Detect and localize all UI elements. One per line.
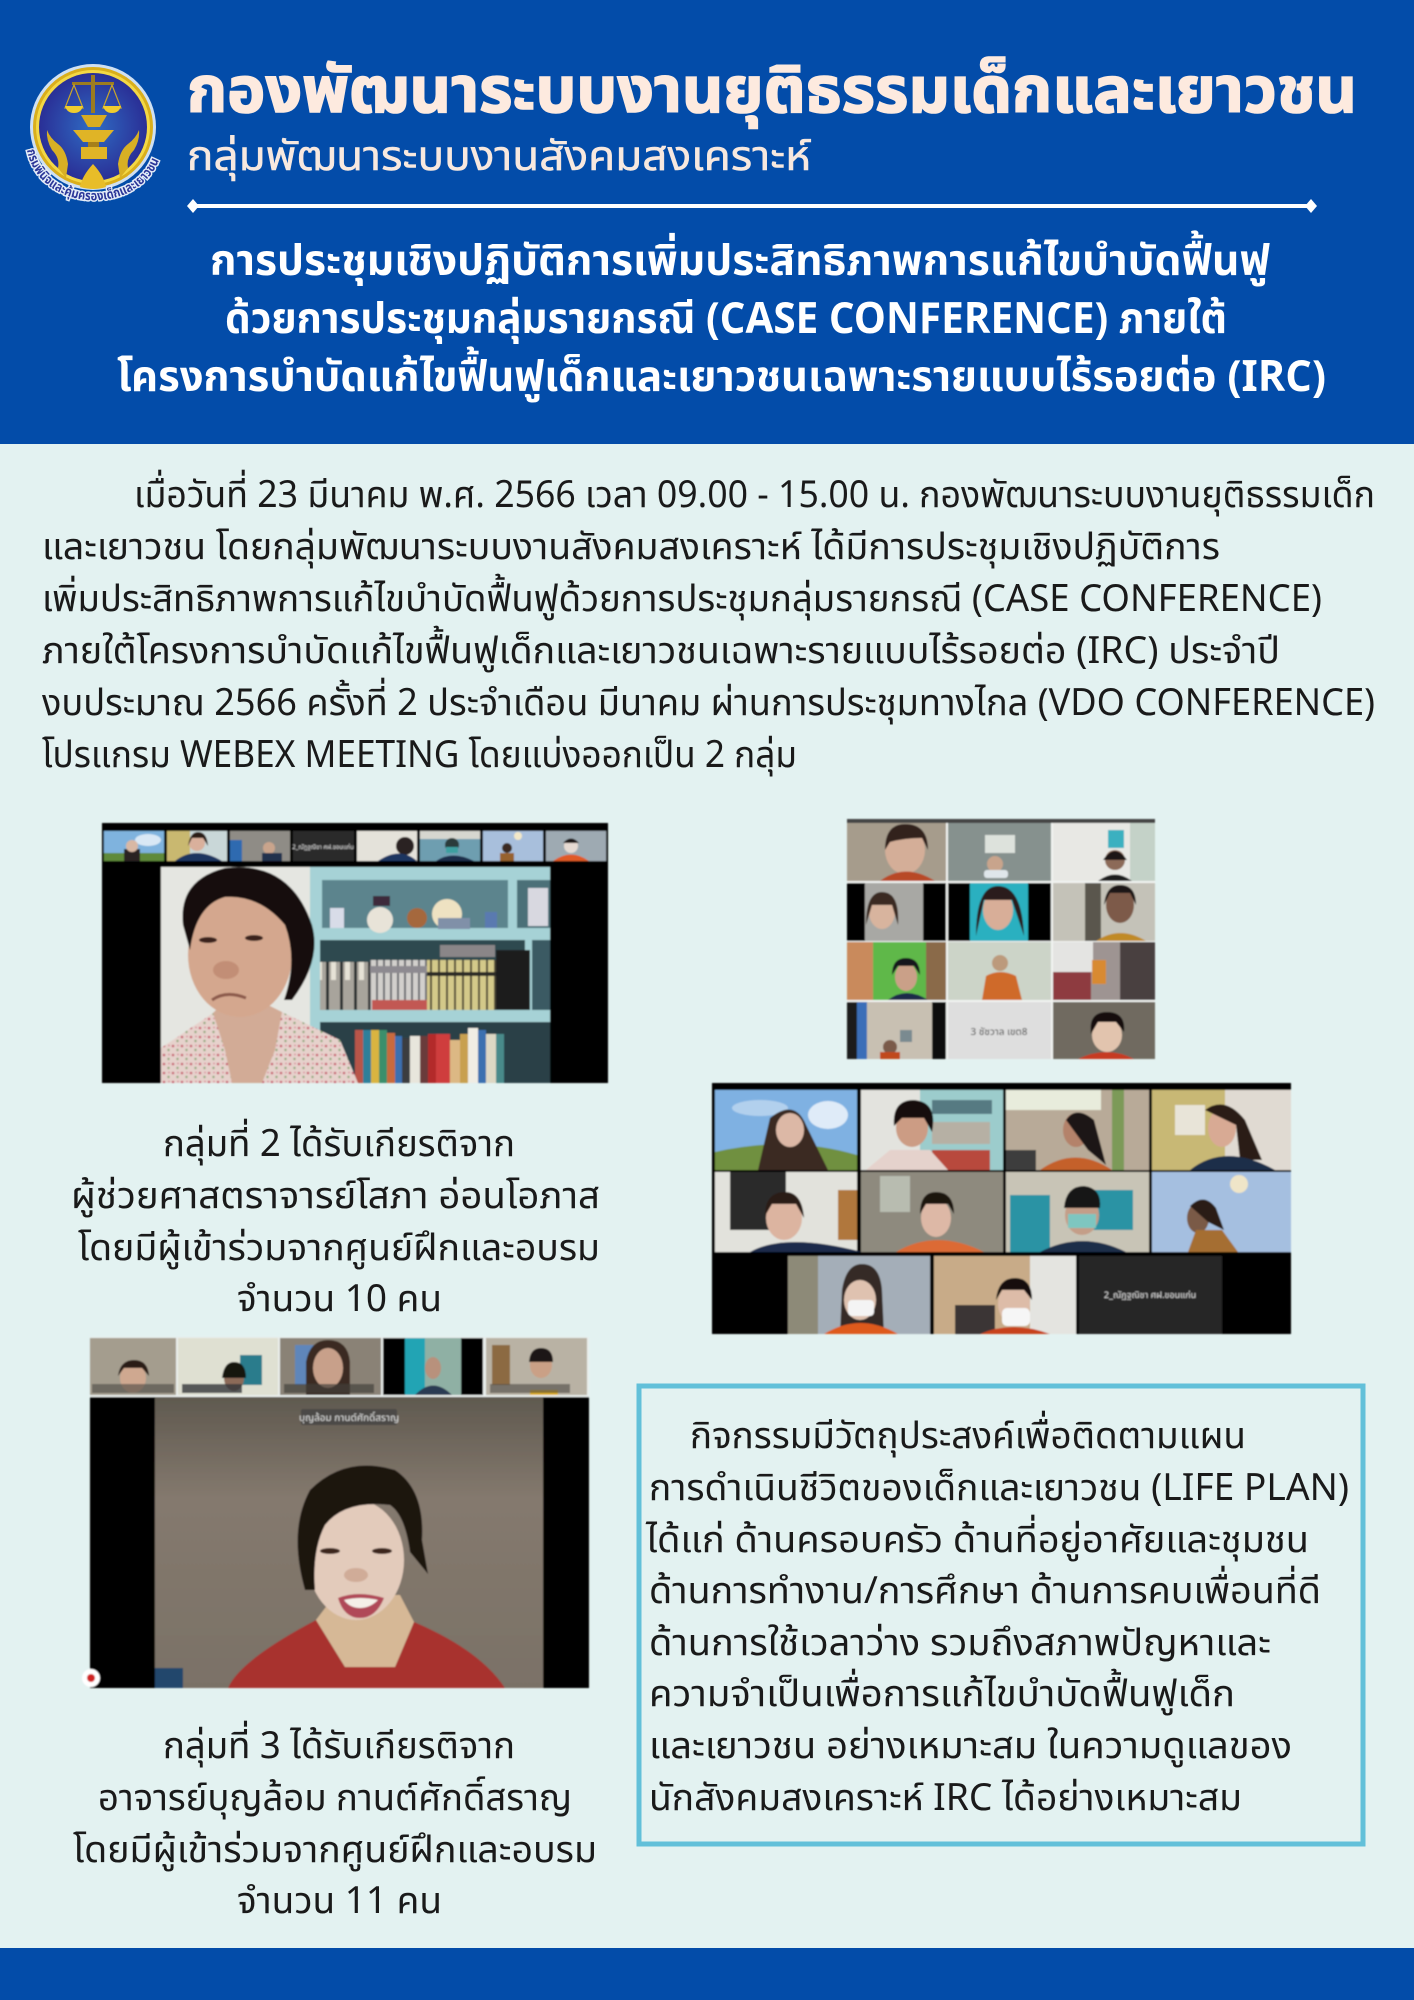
photo: group 2 gallery grid [712,1083,1291,1334]
caption: group 3: อาจารย์บุญล้อม กานต์ศักดิ์สราญ [98,1771,572,1827]
title: กองพัฒนาระบบงานยุติธรรมเด็กและเยาวชน [187,44,1357,141]
text block: introduction: เมื่อวันที่ 23 มีนาคม พ.ศ. 2566 เวลา 09.00 - 15.00 น. กองพัฒนาระบบงานยุติธรรมเด็ก [134,468,1375,524]
callout: activity objectives: ได้แก่ ด้านครอบครัว ด้านที่อยู่อาศัยและชุมชน [645,1513,1309,1569]
text block: introduction: งบประมาณ 2566 ครั้งที่ 2 ประจำเดือน มีนาคม ผ่านการประชุมทางไกล (VDO CONFERENCE) [42,676,1375,732]
caption: group 2 [71,1117,600,1328]
main video [82,1397,589,1688]
thumbnails row: 2_ณัฏฐณิชา ศฝ.ขอนแก่น [292,843,354,852]
text block: introduction: เพิ่มประสิทธิภาพการแก้ไขบำบัดฟื้นฟูด้วยการประชุมกลุ่มรายกรณี (CASE CONFERENCE) [42,572,1322,628]
callout: activity objectives [639,1386,1363,1844]
text block: introduction: และเยาวชน โดยกลุ่มพัฒนาระบบงานสังคมสงเคราะห์ ได้มีการประชุมเชิงปฏิบัติการ [42,520,1220,576]
callout: activity objectives: ด้านการทำงาน/การศึกษา ด้านการคบเพื่อนที่ดี [649,1564,1321,1620]
caption: group 2: ผู้ช่วยศาสตราจารย์โสภา อ่อนโอภาส [71,1169,600,1225]
heading: workshop title: โครงการบำบัดแก้ไขฟื้นฟูเด็กและเยาวชนเฉพาะรายแบบไร้รอยต่อ (IRC) [117,346,1326,411]
caption: group 3: จำนวน 11 คน [237,1874,442,1930]
text block: introduction: โปรแกรม WEBEX MEETING โดยแบ่งออกเป็น 2 กลุ่ม [42,728,797,784]
photo: group 2 gallery grid: 2_ณัฏฐณิชา ศฝ.ขอนแก่น [1104,1289,1196,1303]
caption: group 2: โดยมีผู้เข้าร่วมจากศูนย์ฝึกและอบรม [78,1221,600,1277]
main video: บุญล้อม กานต์ศักดิ์สราญ [299,1410,399,1426]
photo: group 2 speaker video call [102,823,608,1083]
caption: group 3: โดยมีผู้เข้าร่วมจากศูนย์ฝึกและอบรม [73,1823,597,1879]
footer band [0,1948,1414,2000]
caption: group 3: กลุ่มที่ 3 ได้รับเกียรติจาก [163,1719,515,1775]
heading: workshop title [117,230,1326,411]
emblem ribbon text: กรมพินิจและคุ้มครองเด็กและเยาวชน [25,148,161,202]
photo: group 3 gallery grid [847,819,1155,1059]
callout: activity objectives: ความจำเป็นเพื่อการแก้ไขบำบัดฟื้นฟูเด็ก [649,1667,1235,1723]
callout: activity objectives: นักสังคมสงเคราะห์ IRC ได้อย่างเหมาะสม [649,1771,1242,1827]
caption: group 2: กลุ่มที่ 2 ได้รับเกียรติจาก [163,1117,515,1173]
callout: activity objectives: ด้านการใช้เวลาว่าง รวมถึงสภาพปัญหาและ [649,1616,1271,1672]
icon: department emblem [25,64,161,202]
heading: workshop title: ด้วยการประชุมกลุ่มรายกรณี (CASE CONFERENCE) ภายใต้ [225,288,1227,353]
text block: introduction: ภายใต้โครงการบำบัดแก้ไขฟื้นฟูเด็กและเยาวชนเฉพาะรายแบบไร้รอยต่อ (IRC) ประจำปี [42,624,1280,680]
text block: introduction [42,468,1375,784]
callout: activity objectives: การดำเนินชีวิตของเด็กและเยาวชน (LIFE PLAN) [649,1461,1349,1517]
heading: workshop title: การประชุมเชิงปฏิบัติการเพิ่มประสิทธิภาพการแก้ไขบำบัดฟื้นฟู [210,230,1270,295]
callout: activity objectives: กิจกรรมมีวัตถุประสงค์เพื่อติดตามแผน [690,1409,1246,1465]
panel: header band [0,0,1414,444]
callout: activity objectives: และเยาวชน อย่างเหมาะสม ในความดูแลของ [649,1719,1292,1775]
thumbnails row [90,1338,587,1395]
caption: group 3 [73,1719,597,1930]
photo: group 3 gallery grid: 3 ชัชวาล เขต8 [970,1024,1028,1040]
thumbnails row [104,831,606,861]
caption: group 2: จำนวน 10 คน [237,1272,442,1328]
subtitle: กลุ่มพัฒนาระบบงานสังคมสงเคราะห์ [187,127,811,189]
main video [161,867,550,1083]
photo: group 3 speaker video call [82,1337,589,1688]
